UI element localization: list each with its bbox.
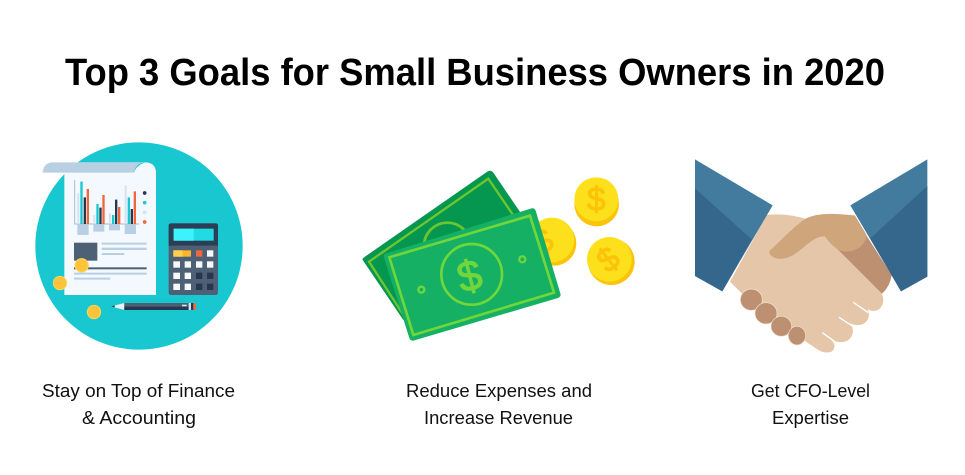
caption: expenses and revenue: Increase Revenue bbox=[424, 408, 573, 428]
gold coins bbox=[53, 259, 101, 319]
coins bbox=[527, 177, 635, 285]
caption: finance and accounting bbox=[42, 381, 235, 428]
paper sheet bbox=[43, 162, 156, 295]
caption: CFO expertise: Expertise bbox=[772, 408, 849, 428]
title: Top 3 Goals for Small Business Owners in 2020 bbox=[65, 52, 885, 94]
front banknote bbox=[384, 208, 561, 341]
caption: expenses and revenue bbox=[406, 381, 592, 428]
back hand bbox=[825, 215, 892, 294]
icon: banknotes and coins bbox=[362, 171, 635, 341]
caption: finance and accounting: & Accounting bbox=[82, 408, 196, 428]
icon: finance report and calculator bbox=[35, 142, 243, 350]
coins: $ bbox=[587, 182, 606, 219]
pen bbox=[111, 303, 196, 310]
left sleeve bbox=[695, 159, 773, 291]
back banknote bbox=[362, 171, 530, 320]
icon: handshake bbox=[695, 159, 927, 353]
right sleeve bbox=[850, 159, 927, 291]
caption: CFO expertise bbox=[751, 381, 870, 428]
caption: finance and accounting: Stay on Top of Finance bbox=[42, 381, 235, 401]
calculator bbox=[169, 223, 218, 295]
front hand bbox=[730, 214, 883, 353]
coins: $ bbox=[590, 240, 627, 280]
finger gaps bbox=[822, 302, 868, 342]
front banknote: $ bbox=[452, 250, 487, 303]
caption: CFO expertise: Get CFO-Level bbox=[751, 381, 870, 401]
fingers bbox=[740, 289, 806, 345]
coins: $ bbox=[527, 221, 559, 263]
caption: expenses and revenue: Reduce Expenses and bbox=[406, 381, 592, 401]
thumb bbox=[769, 214, 867, 259]
